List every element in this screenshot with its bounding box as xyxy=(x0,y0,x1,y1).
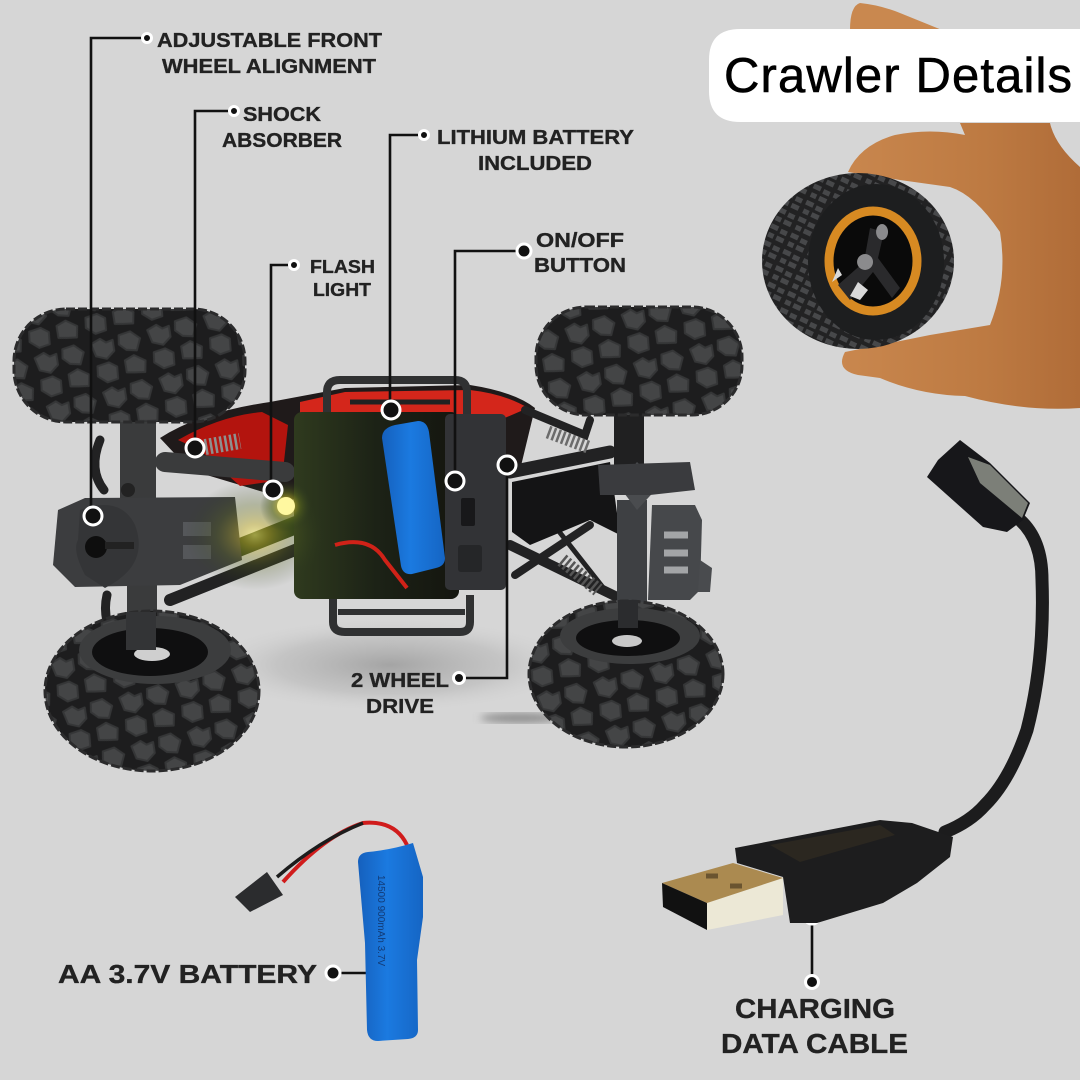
connector xyxy=(927,440,1030,532)
label: shock absorber: ABSORBER xyxy=(222,130,343,152)
chassis arms and frame xyxy=(95,410,615,655)
label: flash light xyxy=(310,257,375,300)
crawler toy car xyxy=(14,307,742,771)
label: charging data cable: DATA CABLE xyxy=(721,1028,908,1059)
right vertical strut xyxy=(614,410,660,615)
label: shock absorber: SHOCK xyxy=(243,104,322,126)
green light flare xyxy=(185,480,325,590)
label: lithium battery included: INCLUDED xyxy=(478,153,592,175)
title box: Crawler Details xyxy=(724,49,1072,103)
hand holding wheel xyxy=(842,3,1080,409)
red car body xyxy=(160,385,535,500)
label: lithium battery included: LITHIUM BATTERY xyxy=(437,127,635,149)
label: adjustable front wheel alignment: WHEEL ALIGNMENT xyxy=(162,56,376,78)
usb plug side xyxy=(707,878,783,930)
wheel gaps xyxy=(832,268,868,300)
usb plug top xyxy=(662,863,783,903)
dark suspension block xyxy=(512,462,620,545)
left vertical strut xyxy=(120,418,157,652)
bottom right tyre xyxy=(529,600,723,747)
usb plug holes xyxy=(706,876,742,886)
usb plug mouth xyxy=(662,883,707,930)
wheel spokes xyxy=(838,228,900,300)
label: on/off button xyxy=(534,230,626,277)
label: on/off button: BUTTON xyxy=(534,255,626,277)
AA battery xyxy=(235,823,423,1041)
label: 2 wheel drive: DRIVE xyxy=(366,696,434,718)
held wheel xyxy=(762,173,954,349)
wheel hub highlights xyxy=(857,224,888,270)
battery compartment xyxy=(294,412,506,599)
label: 2 wheel drive: 2 WHEEL xyxy=(351,670,449,692)
label: adjustable front wheel alignment: ADJUSTABLE FRONT xyxy=(157,30,382,52)
battery wires xyxy=(283,823,407,882)
front right gearbox xyxy=(598,462,712,600)
top left tyre xyxy=(14,309,245,422)
ground shadow xyxy=(200,617,580,723)
roll cage frames xyxy=(327,380,470,632)
top right tyre xyxy=(536,307,742,415)
label: flash light: FLASH xyxy=(310,257,375,277)
front left gearbox xyxy=(53,497,242,588)
label: lithium battery included xyxy=(437,127,635,175)
label: 2 wheel drive xyxy=(351,670,449,718)
bottom left tyre xyxy=(45,611,259,771)
label: shock absorber xyxy=(222,104,343,152)
usb body top shade xyxy=(770,825,895,862)
battery connector xyxy=(235,872,283,912)
charging cable xyxy=(662,440,1042,930)
title box xyxy=(709,29,1080,122)
blue battery inside car xyxy=(382,421,445,574)
battery print: 14500 900mAh 3.7V xyxy=(375,875,386,967)
hand xyxy=(842,123,1080,409)
leader lines xyxy=(91,38,812,982)
cable wire xyxy=(945,520,1042,832)
label: charging data cable: CHARGING xyxy=(735,993,895,1024)
callout markers xyxy=(84,34,820,988)
label: battery: AA 3.7V BATTERY xyxy=(58,959,317,989)
label: adjustable front wheel alignment xyxy=(157,30,382,78)
connector highlight xyxy=(968,457,1028,518)
usb body xyxy=(735,820,953,923)
battery cell xyxy=(358,843,423,1041)
label: charging data cable xyxy=(721,993,908,1059)
fingertip above title xyxy=(850,3,942,30)
label: flash light: LIGHT xyxy=(313,280,371,300)
label: on/off button: ON/OFF xyxy=(536,230,624,252)
